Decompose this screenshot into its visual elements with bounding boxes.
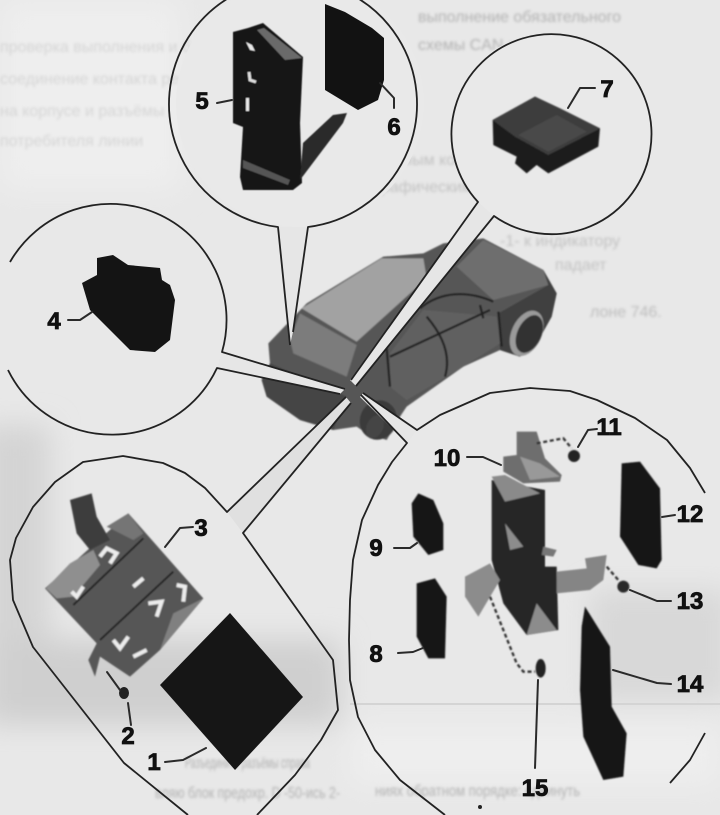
part 12	[620, 462, 662, 568]
part 15	[536, 659, 546, 678]
leader 9	[394, 543, 417, 548]
label 11: 11	[596, 414, 622, 441]
faint show-through text: вляю блок предохр. D -50-ись 2-	[155, 785, 340, 802]
label 14: 14	[677, 671, 704, 698]
part 1	[160, 613, 303, 770]
label 4: 4	[47, 308, 61, 335]
leader 2	[107, 672, 131, 725]
label 7: 7	[600, 76, 614, 103]
label 1: 1	[147, 749, 161, 776]
callout: components 5 and 6	[169, 0, 424, 345]
faint show-through text: падает	[555, 257, 607, 274]
car side detail	[390, 310, 500, 400]
car front bumper	[262, 363, 347, 430]
car rear wheel	[503, 305, 550, 361]
leader 10	[467, 457, 501, 465]
leader 11	[578, 429, 597, 447]
part 8	[417, 578, 447, 658]
leader 3	[165, 527, 193, 547]
callout: components 8 to 15	[349, 388, 705, 815]
leader 12	[662, 515, 675, 517]
part 7	[493, 97, 600, 173]
leader 8	[398, 648, 423, 653]
part 3	[45, 493, 203, 677]
leader 14	[613, 670, 671, 684]
part 5	[233, 23, 347, 190]
faint show-through text: на корпусе и разъёмы	[0, 103, 164, 120]
part 2	[119, 687, 129, 699]
faint show-through text: потребителя линии	[0, 133, 143, 150]
faint show-through text: значение	[480, 279, 549, 296]
car rear quarter	[498, 270, 557, 357]
car	[262, 238, 557, 446]
part 10: central relay carrier	[465, 432, 607, 635]
label 2: 2	[121, 723, 135, 750]
part 14	[580, 607, 627, 780]
leader 4	[68, 312, 92, 320]
leader 1	[165, 748, 206, 762]
part 9	[412, 493, 443, 555]
faint show-through text: соединение контакта реле	[0, 71, 197, 88]
part 6	[325, 4, 384, 110]
car body	[262, 238, 557, 440]
label 13: 13	[677, 588, 703, 615]
leader 5	[217, 100, 232, 103]
callout: component 4	[8, 204, 345, 435]
faint show-through text: лоне 746.	[590, 304, 662, 321]
car windshield	[302, 258, 427, 342]
part 4	[82, 255, 175, 352]
faint show-through text: выполнение обязательного	[418, 9, 621, 26]
callout: component 7	[350, 33, 651, 386]
label 8: 8	[369, 641, 383, 668]
part 11	[568, 450, 580, 462]
speck	[478, 805, 482, 809]
leader 13	[630, 590, 671, 601]
label 6: 6	[387, 114, 401, 141]
faint show-through text: ваемым контактом	[375, 152, 514, 169]
label 3: 3	[194, 515, 208, 542]
leader 7	[568, 88, 595, 108]
label 15: 15	[522, 775, 548, 802]
car front panel	[290, 313, 357, 377]
label 10: 10	[434, 445, 460, 472]
leader 6	[380, 83, 394, 108]
faint show-through text: схемы CAN-шины ЗНК-	[418, 37, 591, 54]
faint show-through text: проверка выполнения и блока	[0, 39, 225, 56]
car door lines	[387, 294, 502, 387]
leader 15	[535, 680, 538, 768]
label 9: 9	[369, 535, 383, 562]
car front wheel	[353, 394, 403, 446]
part 13	[617, 581, 629, 593]
faint show-through text: ниях обратном порядке: сдвинуть	[375, 783, 580, 800]
callout: components 1, 2 and 3	[10, 397, 351, 815]
faint show-through text: -1- к индикатору	[500, 233, 620, 250]
label 12: 12	[677, 501, 703, 528]
faint show-through text: графическим	[375, 179, 473, 196]
dashed connectors	[490, 438, 618, 672]
faint show-through text: Разъедините разъёмы справа	[185, 755, 310, 772]
car roof	[457, 240, 548, 300]
label 5: 5	[195, 88, 209, 115]
